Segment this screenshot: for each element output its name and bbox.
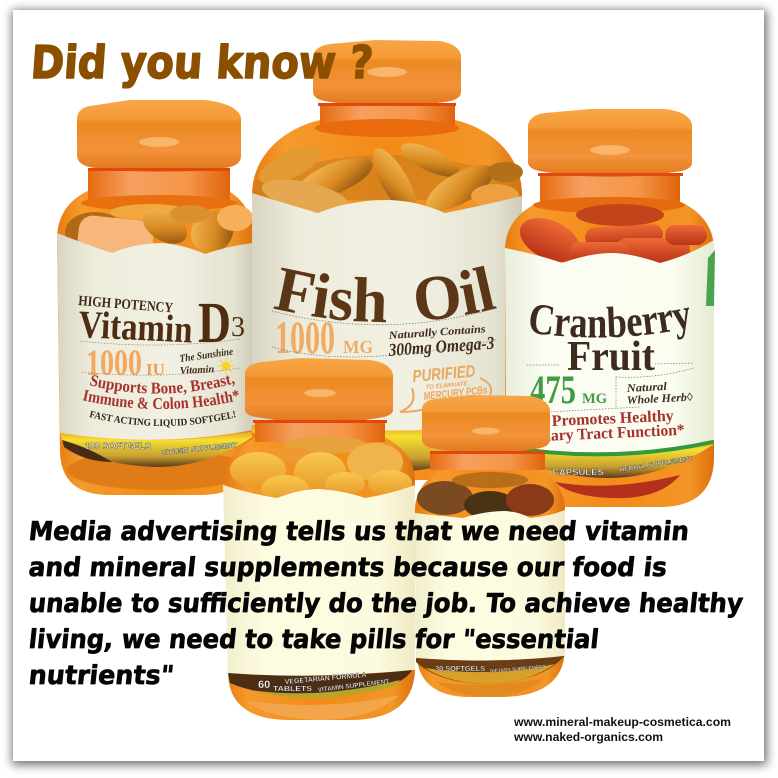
- bottle: softgels (small right): [415, 395, 565, 697]
- label text: MERCURY PCBs: [423, 384, 488, 403]
- label text: The Sunshine: [179, 347, 234, 365]
- band text: TABLETS: [273, 684, 312, 693]
- body text: and mineral supplements because our food is: [27, 553, 668, 583]
- label text: [274, 266, 497, 403]
- label text: CAPSULES: [552, 467, 604, 477]
- label text: Vitamin: [78, 303, 194, 352]
- body text: unable to sufficiently do the job. To achieve healthy: [27, 589, 744, 619]
- label text: HIGH POTENCY: [78, 293, 174, 316]
- body text: Media advertising tells us that we need vitamin: [27, 517, 690, 547]
- label text: Cranberry: [530, 305, 690, 340]
- label text: 3: [231, 312, 245, 343]
- green tab: [706, 250, 715, 306]
- label text: [519, 305, 693, 477]
- softgels: [252, 137, 523, 221]
- label text: Supports Bone, Breast,: [90, 375, 235, 395]
- label text: Fish: [274, 268, 386, 322]
- icon: sun: [218, 358, 234, 374]
- base band: [228, 670, 412, 696]
- softgels: [65, 201, 253, 262]
- body text: nutrients": [27, 661, 175, 691]
- website credits: www.naked-organics.com: [513, 732, 663, 744]
- label text: Fruit: [567, 334, 655, 380]
- label text: [78, 290, 245, 457]
- label text: Whole Herb◊: [627, 392, 693, 407]
- label text: 300mg Omega-3: [387, 333, 495, 360]
- label text: MG: [343, 337, 373, 357]
- herbs: [417, 472, 554, 519]
- label text: 100 SOFTGELS: [85, 441, 151, 451]
- label text: 1000: [275, 312, 335, 364]
- label text: Promotes Healthy: [551, 408, 674, 430]
- cap: [245, 358, 393, 423]
- band text: VITAMIN SUPPLEMENT: [317, 678, 390, 694]
- label text: VITAMIN SUPPLEMENT: [161, 442, 238, 457]
- label text: Oil: [416, 266, 497, 320]
- bottle: Fish Oil: [252, 40, 523, 480]
- band text: [258, 672, 390, 694]
- label text: Urinary Tract Function*: [519, 422, 685, 446]
- cap: [422, 395, 550, 454]
- bottle: tablets (small left): [223, 358, 415, 720]
- band text: DIETARY SUPPLEMENT: [490, 664, 546, 675]
- title: Did you know ?: [29, 36, 375, 89]
- label text: PURIFIED: [412, 362, 476, 386]
- website credits: [513, 717, 731, 744]
- band text: VEGETARIAN FORMULA: [285, 672, 367, 686]
- base band: [60, 431, 254, 467]
- label text: D: [198, 290, 231, 355]
- label text: 475: [530, 367, 576, 412]
- label text: IU: [146, 360, 165, 379]
- bottle: Cranberry Fruit: [505, 109, 715, 507]
- cap: [313, 40, 461, 106]
- label text: Naturally Contains: [387, 323, 486, 342]
- body text: living, we need to take pills for "essential: [27, 625, 600, 655]
- website credits: www.mineral-makeup-cosmetica.com: [513, 717, 731, 729]
- tablets: [230, 436, 412, 503]
- label text: TO ELIMINATE: [426, 381, 469, 391]
- bottle: Vitamin D3: [57, 100, 253, 495]
- cap: [528, 109, 692, 177]
- cap: [77, 100, 241, 172]
- label text: Natural: [625, 381, 668, 395]
- label text: HERBAL SUPPLEMENT: [619, 455, 693, 474]
- base band: [252, 425, 522, 472]
- label text: FAST ACTING LIQUID SOFTGEL!: [89, 410, 236, 428]
- base band: [416, 656, 564, 684]
- band text: 30 SOFTGELS: [435, 664, 485, 673]
- label text: 1000: [86, 343, 142, 384]
- capsules: [513, 204, 707, 271]
- base band: [506, 440, 713, 478]
- body text: [27, 517, 744, 691]
- label text: Vitamin: [180, 364, 215, 377]
- band text: 60: [258, 679, 270, 691]
- label text: MG: [582, 391, 607, 407]
- label text: Immune & Colon Health*: [82, 390, 239, 410]
- band text: [435, 664, 546, 675]
